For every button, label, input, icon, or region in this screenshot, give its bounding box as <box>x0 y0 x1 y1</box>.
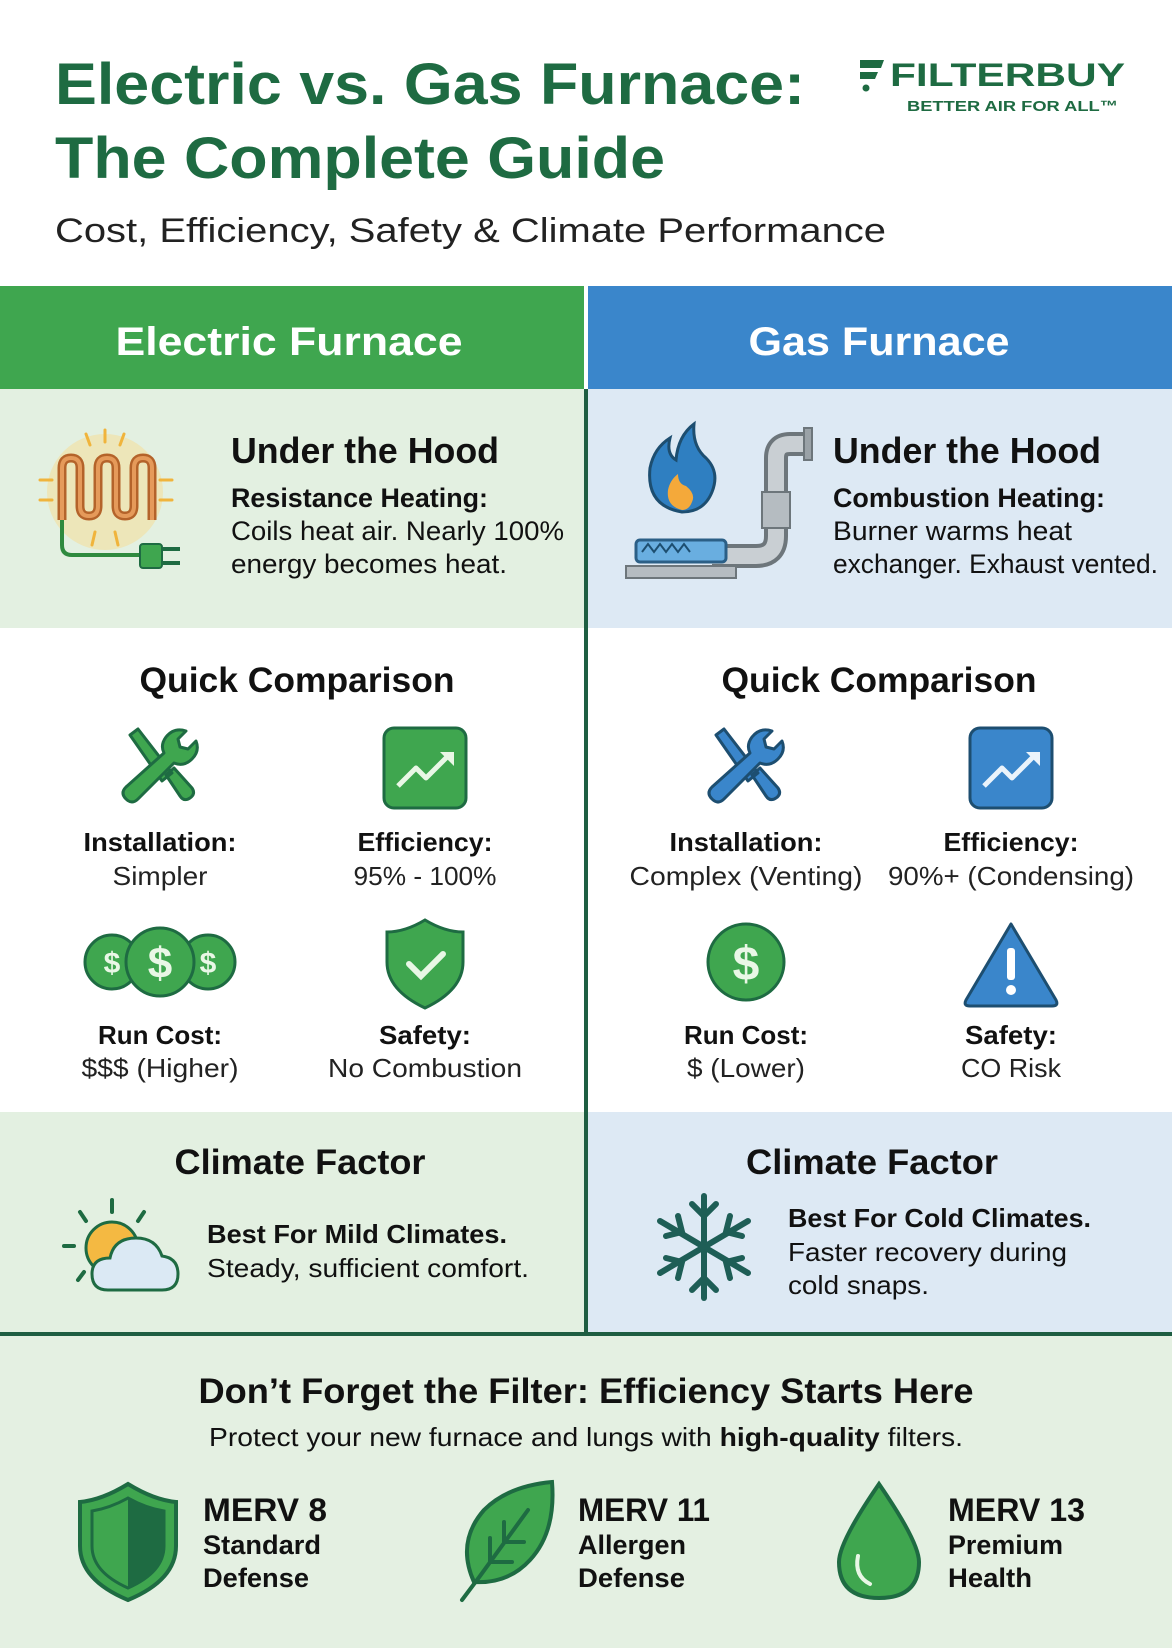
filter: merv 8 <box>80 1484 327 1600</box>
item: electric safety: Safety: <box>379 1020 471 1050</box>
filter: merv 8: Standard <box>203 1530 321 1560</box>
item: gas installation: Installation: <box>670 827 822 857</box>
item: electric installation: Installation: <box>84 827 236 857</box>
heading: filter: Don’t Forget the Filter: Efficiency Starts Here <box>198 1372 973 1411</box>
filter: merv 11: Allergen <box>578 1530 686 1560</box>
item: electric efficiency <box>354 728 496 891</box>
item: electric run cost: $ <box>200 947 217 980</box>
item: gas efficiency: Efficiency: <box>944 827 1078 857</box>
logo <box>860 57 1125 115</box>
item: electric run cost: $ <box>148 939 172 988</box>
text: gas under the hood: Combustion Heating: <box>833 483 1105 513</box>
heading: climate factor electric: Climate Factor <box>174 1143 426 1182</box>
icon: gas burner and pipe <box>626 424 812 578</box>
item: electric safety: No Combustion <box>328 1053 522 1083</box>
text: mild climates: Best For Mild Climates. <box>207 1219 507 1249</box>
subtitle: Cost, Efficiency, Safety & Climate Performance <box>55 212 886 250</box>
text: gas under the hood: exchanger. Exhaust vented. <box>833 549 1158 579</box>
header: gas: Gas Furnace <box>748 320 1010 364</box>
text: electric under the hood: Under the Hood <box>231 430 499 471</box>
text: cold climates: cold snaps. <box>788 1270 929 1300</box>
item: electric efficiency: Efficiency: <box>358 827 492 857</box>
filter: merv 11 <box>462 1482 710 1600</box>
text: cold climates: Best For Cold Climates. <box>788 1203 1091 1233</box>
text: electric under the hood: Coils heat air. Nearly 100% <box>231 516 564 546</box>
item: gas safety: Safety: <box>965 1020 1057 1050</box>
heading: climate factor gas: Climate Factor <box>746 1143 998 1182</box>
heading: filter <box>198 1372 973 1452</box>
title: Electric vs. Gas Furnace: <box>55 52 805 117</box>
heading: quick comparison gas: Quick Comparison <box>722 661 1036 700</box>
item: gas run cost: $ <box>733 938 760 991</box>
text: gas under the hood: Under the Hood <box>833 430 1101 471</box>
item: gas safety: CO Risk <box>961 1053 1062 1083</box>
filter: merv 13: MERV 13 <box>948 1492 1085 1528</box>
text: cold climates: Faster recovery during <box>788 1237 1067 1267</box>
item: gas run cost: $ (Lower) <box>687 1053 805 1083</box>
text: electric under the hood: energy becomes heat. <box>231 549 507 579</box>
text: electric under the hood <box>231 430 564 579</box>
filter: merv 11: Defense <box>578 1563 685 1593</box>
item: gas installation: Complex (Venting) <box>630 861 862 891</box>
text: electric under the hood: Resistance Heating: <box>231 483 488 513</box>
filter: merv 8: Defense <box>203 1563 309 1593</box>
text: gas under the hood <box>833 430 1158 579</box>
header: electric: Electric Furnace <box>116 320 462 364</box>
heading: filter: Protect your new furnace and lungs with high-quality filters. <box>209 1422 963 1452</box>
item: electric safety <box>328 920 522 1083</box>
filter: merv 8: MERV 8 <box>203 1492 327 1528</box>
icon: heating coil <box>40 430 180 568</box>
item: electric run cost: $$$ (Higher) <box>82 1053 238 1083</box>
filter: merv 13 <box>839 1484 1085 1598</box>
item: electric efficiency: 95% - 100% <box>354 861 496 891</box>
item: electric run cost: Run Cost: <box>98 1020 222 1050</box>
heading: quick comparison electric: Quick Comparison <box>140 661 454 700</box>
header: gas <box>588 286 1172 389</box>
text: mild climates <box>207 1219 529 1283</box>
item: gas run cost <box>684 924 808 1083</box>
item: gas safety <box>961 924 1062 1083</box>
item: gas efficiency <box>888 728 1134 891</box>
text: cold climates <box>788 1203 1091 1300</box>
icon: snowflake <box>660 1196 748 1298</box>
header: electric <box>0 286 584 389</box>
logo: FILTERBUY <box>890 57 1125 93</box>
title: The Complete Guide <box>55 126 665 191</box>
text: mild climates: Steady, sufficient comfort. <box>207 1253 529 1283</box>
item: electric installation <box>84 729 236 891</box>
logo: BETTER AIR FOR ALL™ <box>907 98 1118 115</box>
title <box>55 52 805 191</box>
item: gas run cost: Run Cost: <box>684 1020 808 1050</box>
item: electric installation: Simpler <box>112 861 208 891</box>
item: gas efficiency: 90%+ (Condensing) <box>888 861 1134 891</box>
item: gas installation <box>630 729 862 891</box>
icon: sun and cloud <box>64 1200 178 1290</box>
filter: merv 13: Premium <box>948 1530 1063 1560</box>
item: electric run cost <box>82 928 238 1083</box>
item: electric run cost: $ <box>104 947 121 980</box>
filter: merv 13: Health <box>948 1563 1032 1593</box>
text: gas under the hood: Burner warms heat <box>833 516 1073 546</box>
filter: merv 11: MERV 11 <box>578 1492 710 1528</box>
